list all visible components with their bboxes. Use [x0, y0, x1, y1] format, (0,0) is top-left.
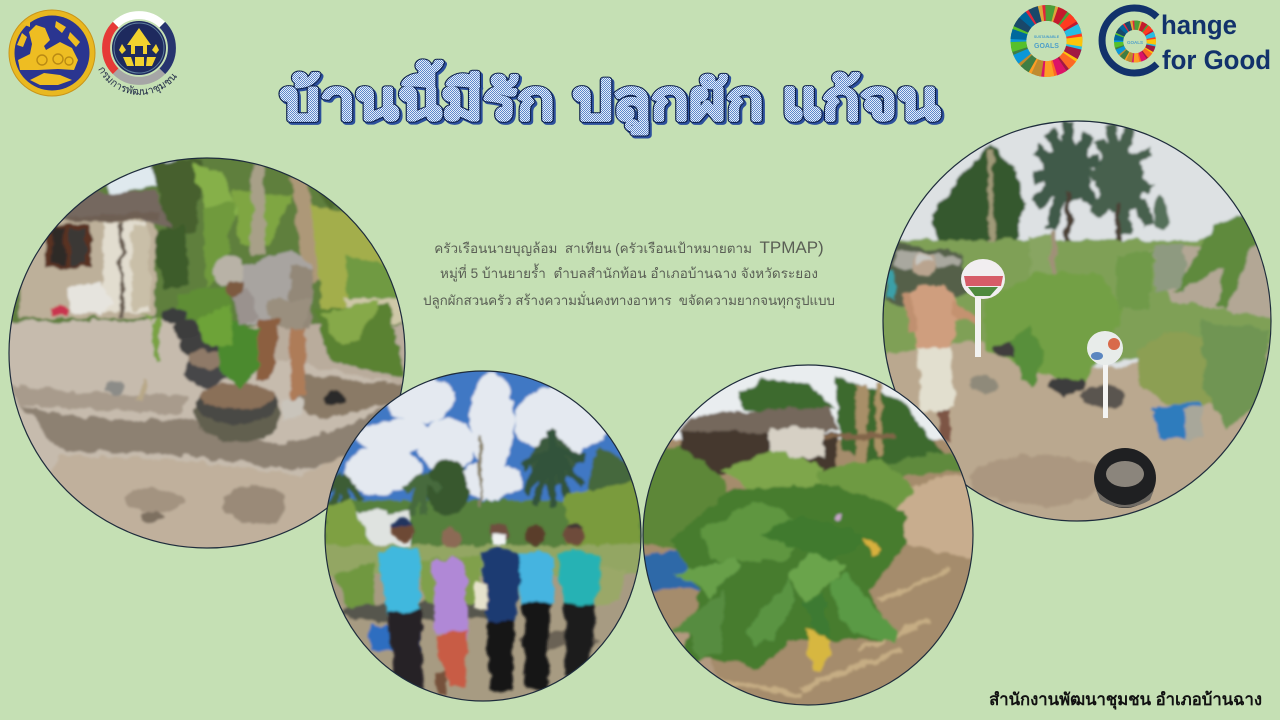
foliage back: [644, 444, 728, 550]
trees: [932, 142, 1024, 260]
description line 1: ครัวเรือนนายบุญล้อม สาเทียน (ครัวเรือนเป้าหมายตาม TPMAP): [434, 238, 824, 257]
logo: Change for Good: GOALS: [1127, 40, 1143, 45]
coconut seedling: [140, 312, 163, 362]
logo: Naga seal emblem: [9, 10, 95, 96]
yellow leaf: [807, 628, 830, 672]
sign small: [1103, 362, 1108, 418]
man: [906, 285, 960, 350]
title: บ้านนี้มีรัก ปลูกผัก แก้จน: [282, 63, 942, 136]
ground: [10, 316, 392, 476]
footer: office name: สำนักงานพัฒนาชุมชน อำเภอบ้านฉาง: [989, 690, 1262, 710]
trees: [738, 378, 835, 415]
house: [350, 512, 410, 548]
wordmark line 2: for Good: [1162, 45, 1271, 75]
people: [378, 518, 600, 696]
bushes: [985, 272, 1125, 385]
foliage main: [670, 485, 905, 670]
blue tub: [640, 548, 705, 590]
photo circle: farmer planting in tyre pots: [0, 150, 420, 560]
title: บ้านนี้มีรัก ปลูกผัก แก้จน: [280, 61, 940, 134]
description line 3: ปลูกผักสวนครัว สร้างความมั่นคงทางอาหาร ขจัดความยากจนทุกรูปแบบ: [423, 291, 835, 309]
description line 2: หมู่ที่ 5 บ้านยายร้ำ ตำบลสำนักท้อน อำเภอบ้านฉาง จังหวัดระยอง: [440, 263, 818, 282]
clouds: [345, 372, 610, 500]
ground: [885, 340, 1270, 530]
hay streaks: [720, 570, 950, 695]
mid ground: [880, 240, 1275, 360]
palms: [1044, 142, 1092, 202]
banana leaves: [1172, 212, 1262, 310]
man: [232, 248, 312, 325]
logo: Change for Good: [1102, 8, 1271, 75]
house: [20, 218, 155, 318]
hut: [678, 408, 838, 440]
big leaves: [672, 558, 742, 600]
SDG wheel caption: SUSTAINABLE: [1034, 35, 1060, 39]
title: บ้านนี้มีรัก ปลูกผัก แก้จน: [280, 61, 940, 134]
sign large: [975, 295, 981, 357]
photo circle: right, man with garden signs: [880, 115, 1280, 530]
palm trees: [530, 438, 574, 486]
photo circle: farm, handover with five people: [320, 365, 650, 710]
banana foliage: [562, 480, 640, 547]
photo circle: eggplant plant and hut: [642, 364, 974, 706]
logo: SDG wheel: [1007, 1, 1086, 81]
title: [280, 61, 942, 136]
wordmark line 1: hange: [1161, 10, 1237, 40]
ground: [896, 474, 972, 560]
logo: SDG wheel: GOALS: [1034, 43, 1059, 50]
description text: [423, 238, 835, 309]
logo wordmark: กรมการพัฒนาชุมชน: [98, 67, 177, 96]
logo: Community Development Department: [98, 11, 177, 96]
tyre: [1094, 448, 1156, 508]
pots: [1048, 377, 1086, 395]
plant: [218, 320, 266, 390]
tyres: [163, 308, 187, 324]
